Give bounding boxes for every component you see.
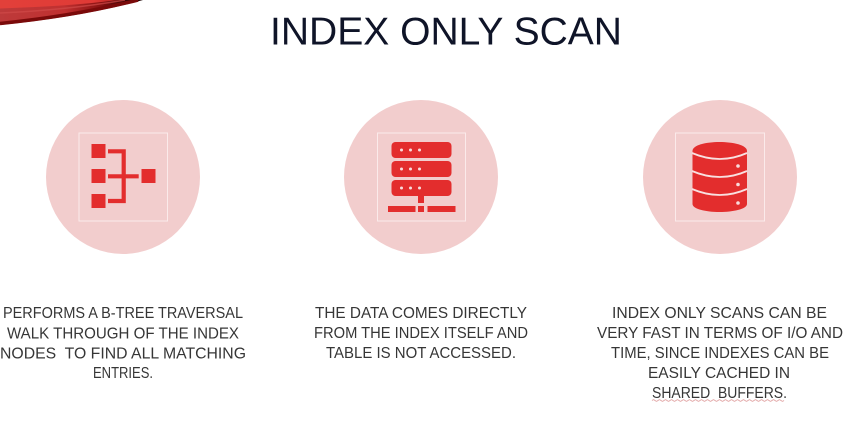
text block: b-tree traversal: PERFORMS A B-TREE TRAVERSAL [3, 305, 243, 322]
icon: server stack in circle [344, 100, 498, 254]
text block: fast scans: INDEX ONLY SCANS CAN BE [612, 305, 827, 322]
text block: fast scans: VERY FAST IN TERMS OF I/O AND [597, 325, 843, 342]
text block: fast scans [597, 305, 843, 402]
text block: data from index [314, 305, 528, 362]
text block: data from index: FROM THE INDEX ITSELF AND [314, 325, 528, 342]
text block: b-tree traversal: WALK THROUGH OF THE INDEX [7, 326, 239, 342]
text block: fast scans: TIME, SINCE INDEXES CAN BE [611, 345, 829, 362]
title: INDEX ONLY SCAN [270, 10, 622, 54]
text block: b-tree traversal: ENTRIES. [93, 365, 153, 382]
icon: database cylinder in circle [643, 100, 797, 254]
decorative red swoosh [0, 0, 143, 25]
text block: fast scans: SHARED BUFFERS. [652, 385, 787, 402]
text block: data from index: THE DATA COMES DIRECTLY [315, 305, 527, 322]
text block: fast scans: EASILY CACHED IN [648, 365, 790, 382]
text block: data from index: TABLE IS NOT ACCESSED. [326, 345, 516, 362]
text block: b-tree traversal: NODES TO FIND ALL MATCHING [0, 346, 246, 362]
text block: b-tree traversal [0, 305, 246, 382]
icon: hierarchy tree in circle [46, 100, 200, 254]
